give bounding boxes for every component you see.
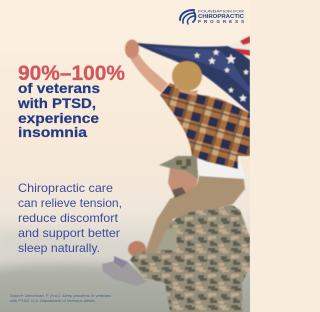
boy's head — [172, 61, 202, 91]
logo text: FOUNDATION FOR — [198, 10, 245, 14]
boy's arm — [129, 54, 168, 93]
headline text: of veterans — [18, 80, 100, 96]
distant hills — [0, 232, 150, 312]
source: Source: Dehchnari, P. (n.d.). Sleep problems in veterans — [10, 294, 111, 298]
headline text — [17, 80, 100, 140]
headline text: with PTSD, — [17, 95, 96, 111]
source: with PTSD. U.S. Department of Veterans Affairs — [10, 299, 95, 303]
boy's hand — [125, 40, 139, 58]
body text: can relieve tension, — [18, 197, 122, 210]
body text: sleep naturally. — [18, 242, 100, 255]
man's head — [168, 168, 198, 198]
body text: Chiropractic care — [18, 182, 113, 195]
body text — [18, 182, 122, 255]
boy's pants — [145, 172, 245, 253]
boy's plaid shirt — [160, 83, 250, 169]
man's uniform — [130, 205, 250, 312]
foreground hill — [0, 264, 260, 312]
sleeve patch — [157, 228, 177, 250]
body text: reduce discomfort — [18, 212, 119, 225]
logo — [180, 10, 245, 24]
boy's white shirt — [193, 156, 245, 179]
photo: father and son with flag — [102, 36, 250, 312]
logo: PROGRESS — [198, 19, 244, 24]
background sky — [0, 0, 250, 312]
logo: CHIROPRACTIC — [198, 14, 244, 20]
body text: and support better — [18, 227, 120, 240]
headline text: insomnia — [18, 124, 87, 140]
logo mark — [180, 10, 195, 24]
source — [10, 294, 111, 303]
shoelaces — [114, 256, 128, 268]
flag stars — [194, 49, 249, 102]
headline — [17, 62, 125, 140]
man's hand — [128, 241, 146, 257]
statistic: 90%–100% — [18, 62, 125, 85]
flag — [137, 36, 250, 113]
camo cap — [159, 156, 198, 179]
infographic — [0, 9, 250, 312]
headline text: experience — [18, 110, 99, 126]
man's shoe — [102, 261, 147, 286]
